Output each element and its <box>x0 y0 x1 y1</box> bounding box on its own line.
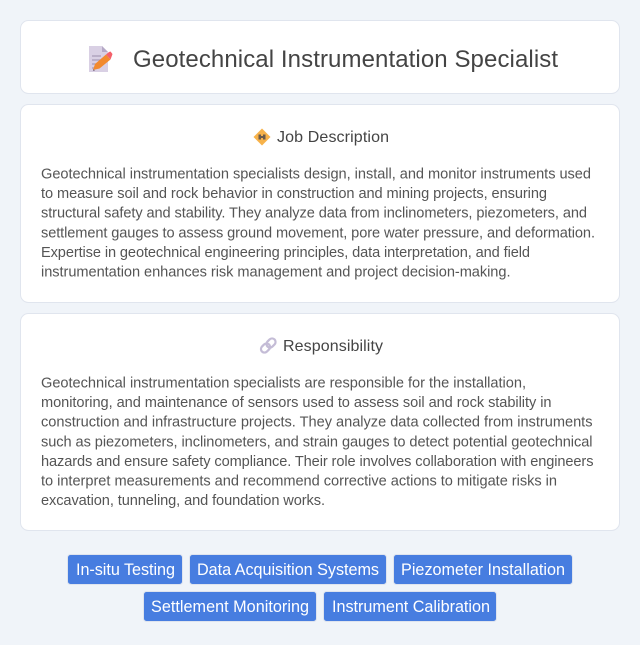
text block: job description: settlement gauges to assess ground movement, pore water pressure, and deformation. <box>41 225 595 241</box>
text block: job description: Geotechnical instrumentation specialists design, install, and monitor instruments used <box>41 166 591 182</box>
panel: title card <box>20 20 620 94</box>
text block: responsibility: such as piezometers, inclinometers, and strain gauges to detect potential geotechnical <box>41 434 592 450</box>
text block: responsibility: Geotechnical instrumentation specialists are responsible for the installation, <box>41 376 526 392</box>
tag: data acquisition systems <box>190 554 386 584</box>
text block: responsibility: to interpret measurements and recommend corrective actions to mitigate risks in <box>41 474 557 490</box>
text block: job description: instrumentation enhances risk management and project decision-making. <box>41 264 510 280</box>
icon: chain link <box>259 337 277 354</box>
text block: responsibility: monitoring, and maintenance of sensors used to assess soil and rock stability in <box>41 395 552 411</box>
heading: responsibility: Responsibility <box>283 338 383 355</box>
tag: settlement monitoring <box>144 592 316 622</box>
tag: piezometer installation <box>394 554 572 584</box>
text block: job description: to measure soil and rock behavior in construction and mining projects, ensuring <box>41 186 547 202</box>
tag: settlement monitoring: Settlement Monitoring <box>151 598 309 616</box>
text block: job description: Expertise in geotechnical engineering principles, data interpretation, and field <box>41 245 530 261</box>
text block: job description: structural safety and stability. They analyze data from inclinometers, piezometers, and <box>41 206 587 222</box>
icon: document with pencil <box>89 46 112 72</box>
tag: in-situ testing: In-situ Testing <box>76 561 175 579</box>
icon: orange diamond <box>254 128 270 146</box>
text block: responsibility: excavation, tunneling, and foundation works. <box>41 493 325 509</box>
text block: responsibility: hazards and ensure safety compliance. Their role involves collaboration with engineers <box>41 454 594 470</box>
tag: in-situ testing <box>68 554 182 584</box>
panel: responsibility <box>20 314 620 530</box>
tag: piezometer installation: Piezometer Installation <box>401 561 565 579</box>
heading: job description: Job Description <box>277 129 389 146</box>
tag: instrument calibration: Instrument Calibration <box>332 598 490 616</box>
tag: instrument calibration <box>324 592 496 622</box>
tag: data acquisition systems: Data Acquisition Systems <box>197 561 379 579</box>
text block: job description <box>41 166 595 280</box>
panel: job description <box>20 104 620 302</box>
text block: responsibility <box>41 376 594 509</box>
text block: responsibility: construction and infrastructure projects. They analyze data collected from instruments <box>41 415 592 431</box>
title: Geotechnical Instrumentation Specialist <box>133 46 558 73</box>
tags <box>68 554 572 622</box>
